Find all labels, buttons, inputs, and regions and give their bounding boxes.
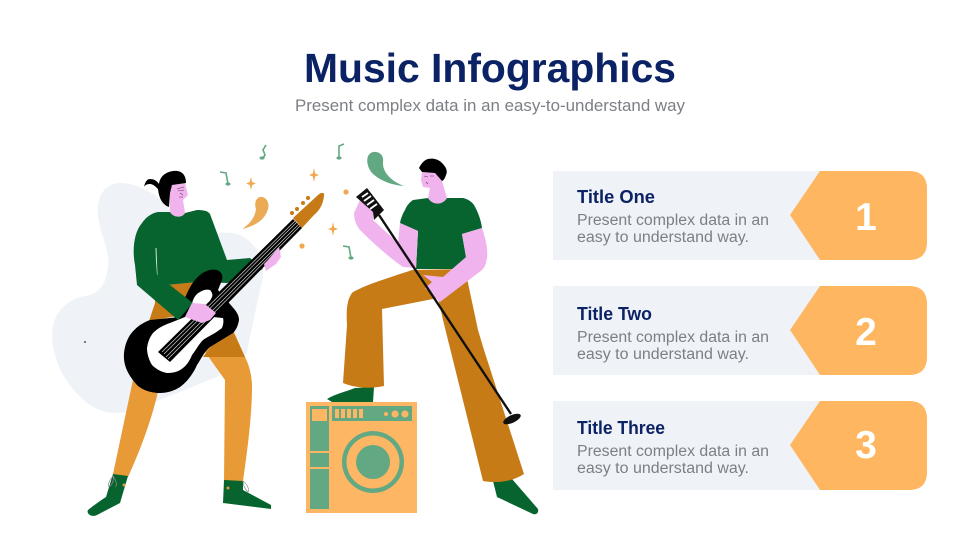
card 1 text: Present complex data in an <box>577 212 769 229</box>
decorative notes and sparkles <box>220 144 404 260</box>
card 1 title: Title One <box>577 186 655 207</box>
guitarist hair <box>144 171 186 207</box>
guitar face <box>147 290 223 373</box>
microphone <box>356 188 384 220</box>
singer head and neck <box>421 172 447 204</box>
card 2 number: 2 <box>855 311 877 354</box>
guitar neck <box>158 219 302 362</box>
card 3 text: easy to understand way. <box>577 460 749 477</box>
guitarist neck and face <box>170 183 188 217</box>
card 3 number: 3 <box>855 424 877 467</box>
guitarist legs <box>113 330 252 481</box>
guitarist <box>88 171 324 516</box>
card 1 badge <box>790 171 927 260</box>
card 2 text: easy to understand way. <box>577 346 749 363</box>
singer <box>306 159 538 514</box>
singer boots <box>327 387 538 514</box>
guitar body <box>124 270 239 393</box>
card 2 badge <box>790 286 927 375</box>
background blob <box>52 183 263 413</box>
singer arms <box>354 200 487 302</box>
singer face details <box>424 176 434 184</box>
singer shirt <box>400 198 482 269</box>
card 2 <box>553 286 927 375</box>
singer trousers <box>343 269 524 482</box>
card 1 <box>553 171 927 260</box>
card 1 number: 1 <box>855 196 877 239</box>
guitarist face details <box>177 187 184 197</box>
card 3 text: Present complex data in an <box>577 443 769 460</box>
guitarist hands <box>185 247 281 323</box>
guitarist boots <box>88 474 271 516</box>
amp <box>306 402 417 513</box>
sweater highlight <box>156 248 157 275</box>
subtitle: Present complex data in an easy-to-understand way <box>295 96 685 115</box>
guitarist sweater <box>134 210 263 285</box>
card 3 title: Title Three <box>577 417 665 438</box>
mic stand <box>379 215 522 426</box>
title: Music Infographics <box>304 45 676 91</box>
card 3 <box>553 401 927 490</box>
guitarist waist <box>149 277 197 321</box>
singer hair <box>419 159 447 181</box>
card 2 title: Title Two <box>577 303 652 324</box>
speck <box>84 341 86 343</box>
guitar head <box>290 193 324 228</box>
card 2 text: Present complex data in an <box>577 329 769 346</box>
card 1 text: easy to understand way. <box>577 229 749 246</box>
card 3 badge <box>790 401 927 490</box>
guitarist forearm <box>135 262 193 320</box>
